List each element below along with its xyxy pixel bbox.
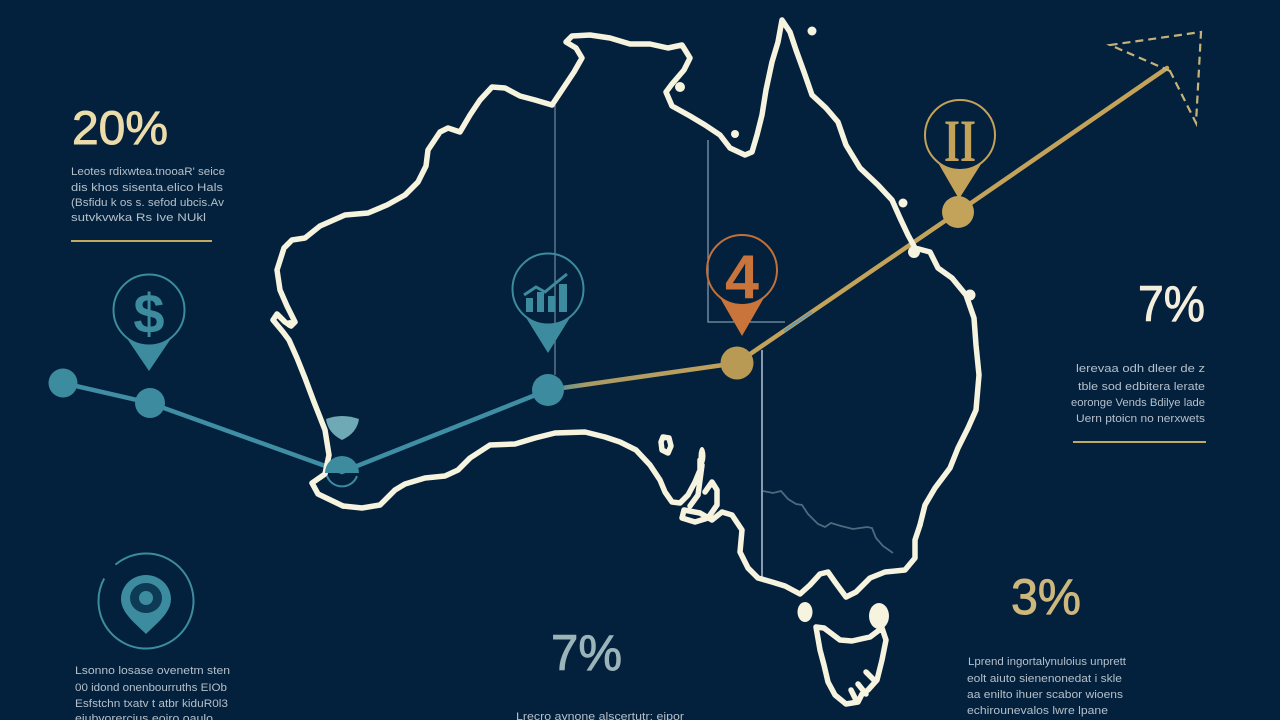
data node 6 [942, 196, 974, 228]
description text: dis khos sisenta.elico Hals [71, 182, 224, 194]
description text: eolt aiuto sienenonedat i skle [967, 673, 1122, 685]
pin: dollar [114, 274, 184, 371]
data node 5 [720, 346, 754, 380]
map: small islands and coastal details [286, 26, 976, 465]
stat: bottom right: 3% [1011, 569, 1081, 625]
stat: bottom right [967, 569, 1126, 717]
pin: bar chart [512, 254, 584, 353]
data node 4 [532, 374, 564, 406]
description text: tble sod edbitera lerate [1078, 381, 1205, 393]
data node 3 with droplet [325, 416, 359, 486]
pin: number four: 4 [725, 243, 760, 312]
description text: location badge: 00 idond onenbourruths EIOb [75, 682, 227, 694]
description text [1071, 363, 1206, 425]
growth line: teal section [63, 383, 548, 472]
map: Tasmania [798, 602, 889, 704]
icon: location badge [79, 534, 213, 668]
description text: aa enilto ihuer scabor wioens [967, 689, 1124, 701]
growth line: gold rising section [737, 68, 1167, 363]
description text: Leotes rdixwtea.tnooaR' seice [71, 166, 225, 178]
gold rule [1073, 441, 1206, 443]
description text: location badge: Lsonno losase ovenetm sten [75, 665, 230, 677]
stat: bottom centre: 7% [551, 625, 622, 681]
description text: echirounevalos lwre lpane [967, 705, 1108, 717]
stat: top left [71, 101, 225, 242]
description text: Uern ptoicn no nerxwets [1076, 413, 1206, 425]
map: Australia coastline [273, 20, 979, 597]
pin: number four [707, 235, 777, 336]
description text: eoronge Vends Bdilye lade [1071, 397, 1205, 409]
map guide lines [555, 105, 893, 577]
data node 2 [135, 388, 165, 418]
arrowhead: dashed outline [1110, 32, 1201, 123]
description text: (Bsfidu k os s. sefod ubcis.Av [71, 197, 225, 209]
description text: sutvkvwka Rs Ive NUkl [71, 212, 206, 224]
description text: location badge: Esfstchn txatv t atbr kiduR0l3 [75, 698, 228, 710]
growth line: blue accent [784, 312, 812, 331]
description text: location badge [75, 665, 230, 720]
description text: Lprend ingortalynuloius unprett [968, 656, 1126, 668]
description text [71, 166, 225, 224]
stat: bottom centre [516, 625, 684, 720]
growth line: transition to gold [548, 363, 737, 390]
data node 1 [48, 368, 78, 398]
description text: lerevaa odh dleer de z [1076, 363, 1205, 375]
pin: roman two: II [944, 108, 976, 174]
description text [967, 656, 1126, 717]
pin: dollar: $ [133, 282, 165, 345]
stat: top left: 20% [72, 101, 168, 154]
gold rule [71, 240, 212, 242]
stat: right: 7% [1138, 276, 1205, 332]
stat: right [1071, 276, 1206, 443]
pin: roman two [925, 100, 995, 199]
